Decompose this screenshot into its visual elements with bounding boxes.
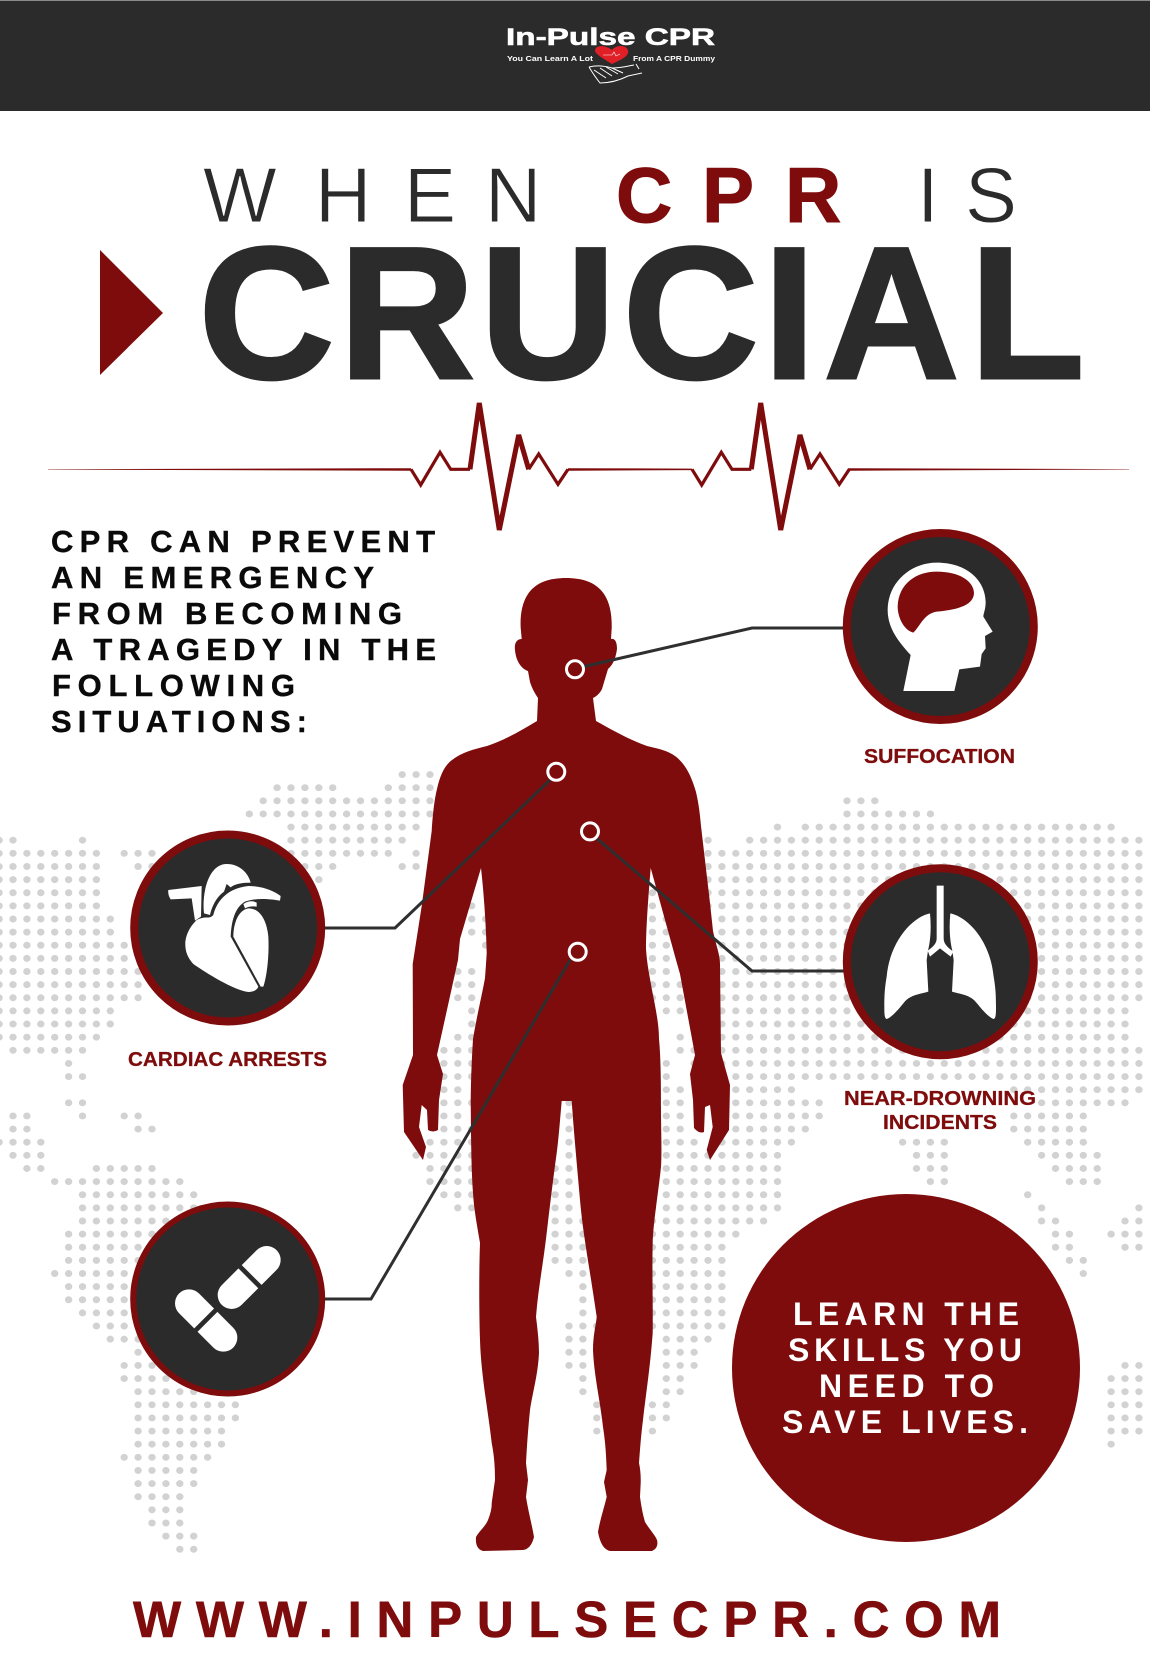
title line: WHEN CPR IS: IS: [917, 151, 1017, 239]
label: cardiac arrests: CARDIAC ARRESTS: [128, 1048, 327, 1071]
logo: In-Pulse CPR: You Can Learn A Lot: [507, 54, 594, 63]
callout: learn the skills: NEED TO: [819, 1368, 994, 1404]
intro text block: A TRAGEDY IN THE: [51, 632, 436, 667]
logo: In-Pulse CPR: In-Pulse CPR: [506, 24, 715, 51]
icon: heart: [134, 834, 321, 1022]
header bar: [0, 0, 1150, 111]
heartbeat line: [48, 403, 1129, 530]
title line: WHEN CPR IS: CPR: [616, 151, 841, 239]
label: suffocation: SUFFOCATION: [864, 745, 1015, 768]
callout: learn the skills: SAVE LIVES.: [782, 1404, 1028, 1440]
title line: WHEN CPR IS: [203, 151, 1017, 239]
connector lines: [323, 628, 845, 1299]
title: CRUCIAL: CRUCIAL: [199, 208, 1085, 418]
body marker points: [548, 661, 598, 960]
logo: In-Pulse CPR: [506, 24, 716, 83]
label: near-drowning incidents: [844, 1087, 1036, 1134]
callout: learn the skills: SKILLS YOU: [788, 1332, 1022, 1368]
icon: lungs: [847, 868, 1034, 1055]
arrow marker: [100, 250, 163, 375]
human body silhouette: [403, 578, 730, 1551]
label: near-drowning incidents: INCIDENTS: [883, 1111, 997, 1134]
intro text block: CPR CAN PREVENT: [51, 524, 435, 559]
intro text block: [51, 524, 436, 739]
intro text block: FROM BECOMING: [52, 596, 402, 631]
label: near-drowning incidents: NEAR-DROWNING: [844, 1087, 1036, 1110]
title line: WHEN CPR IS: WHEN: [203, 151, 541, 239]
footer url: WWW.INPULSECPR.COM: [133, 1591, 1001, 1648]
logo: In-Pulse CPR: From A CPR Dummy: [633, 54, 716, 63]
intro text block: AN EMERGENCY: [51, 560, 374, 595]
dotted world map background: [0, 775, 1139, 1549]
icon: pills: [133, 1204, 322, 1394]
callout: learn the skills: LEARN THE: [793, 1296, 1019, 1332]
icon: head with brain: [847, 533, 1034, 720]
intro text block: FOLLOWING: [52, 668, 295, 703]
intro text block: SITUATIONS:: [51, 704, 307, 739]
callout: learn the skills: [732, 1194, 1080, 1542]
